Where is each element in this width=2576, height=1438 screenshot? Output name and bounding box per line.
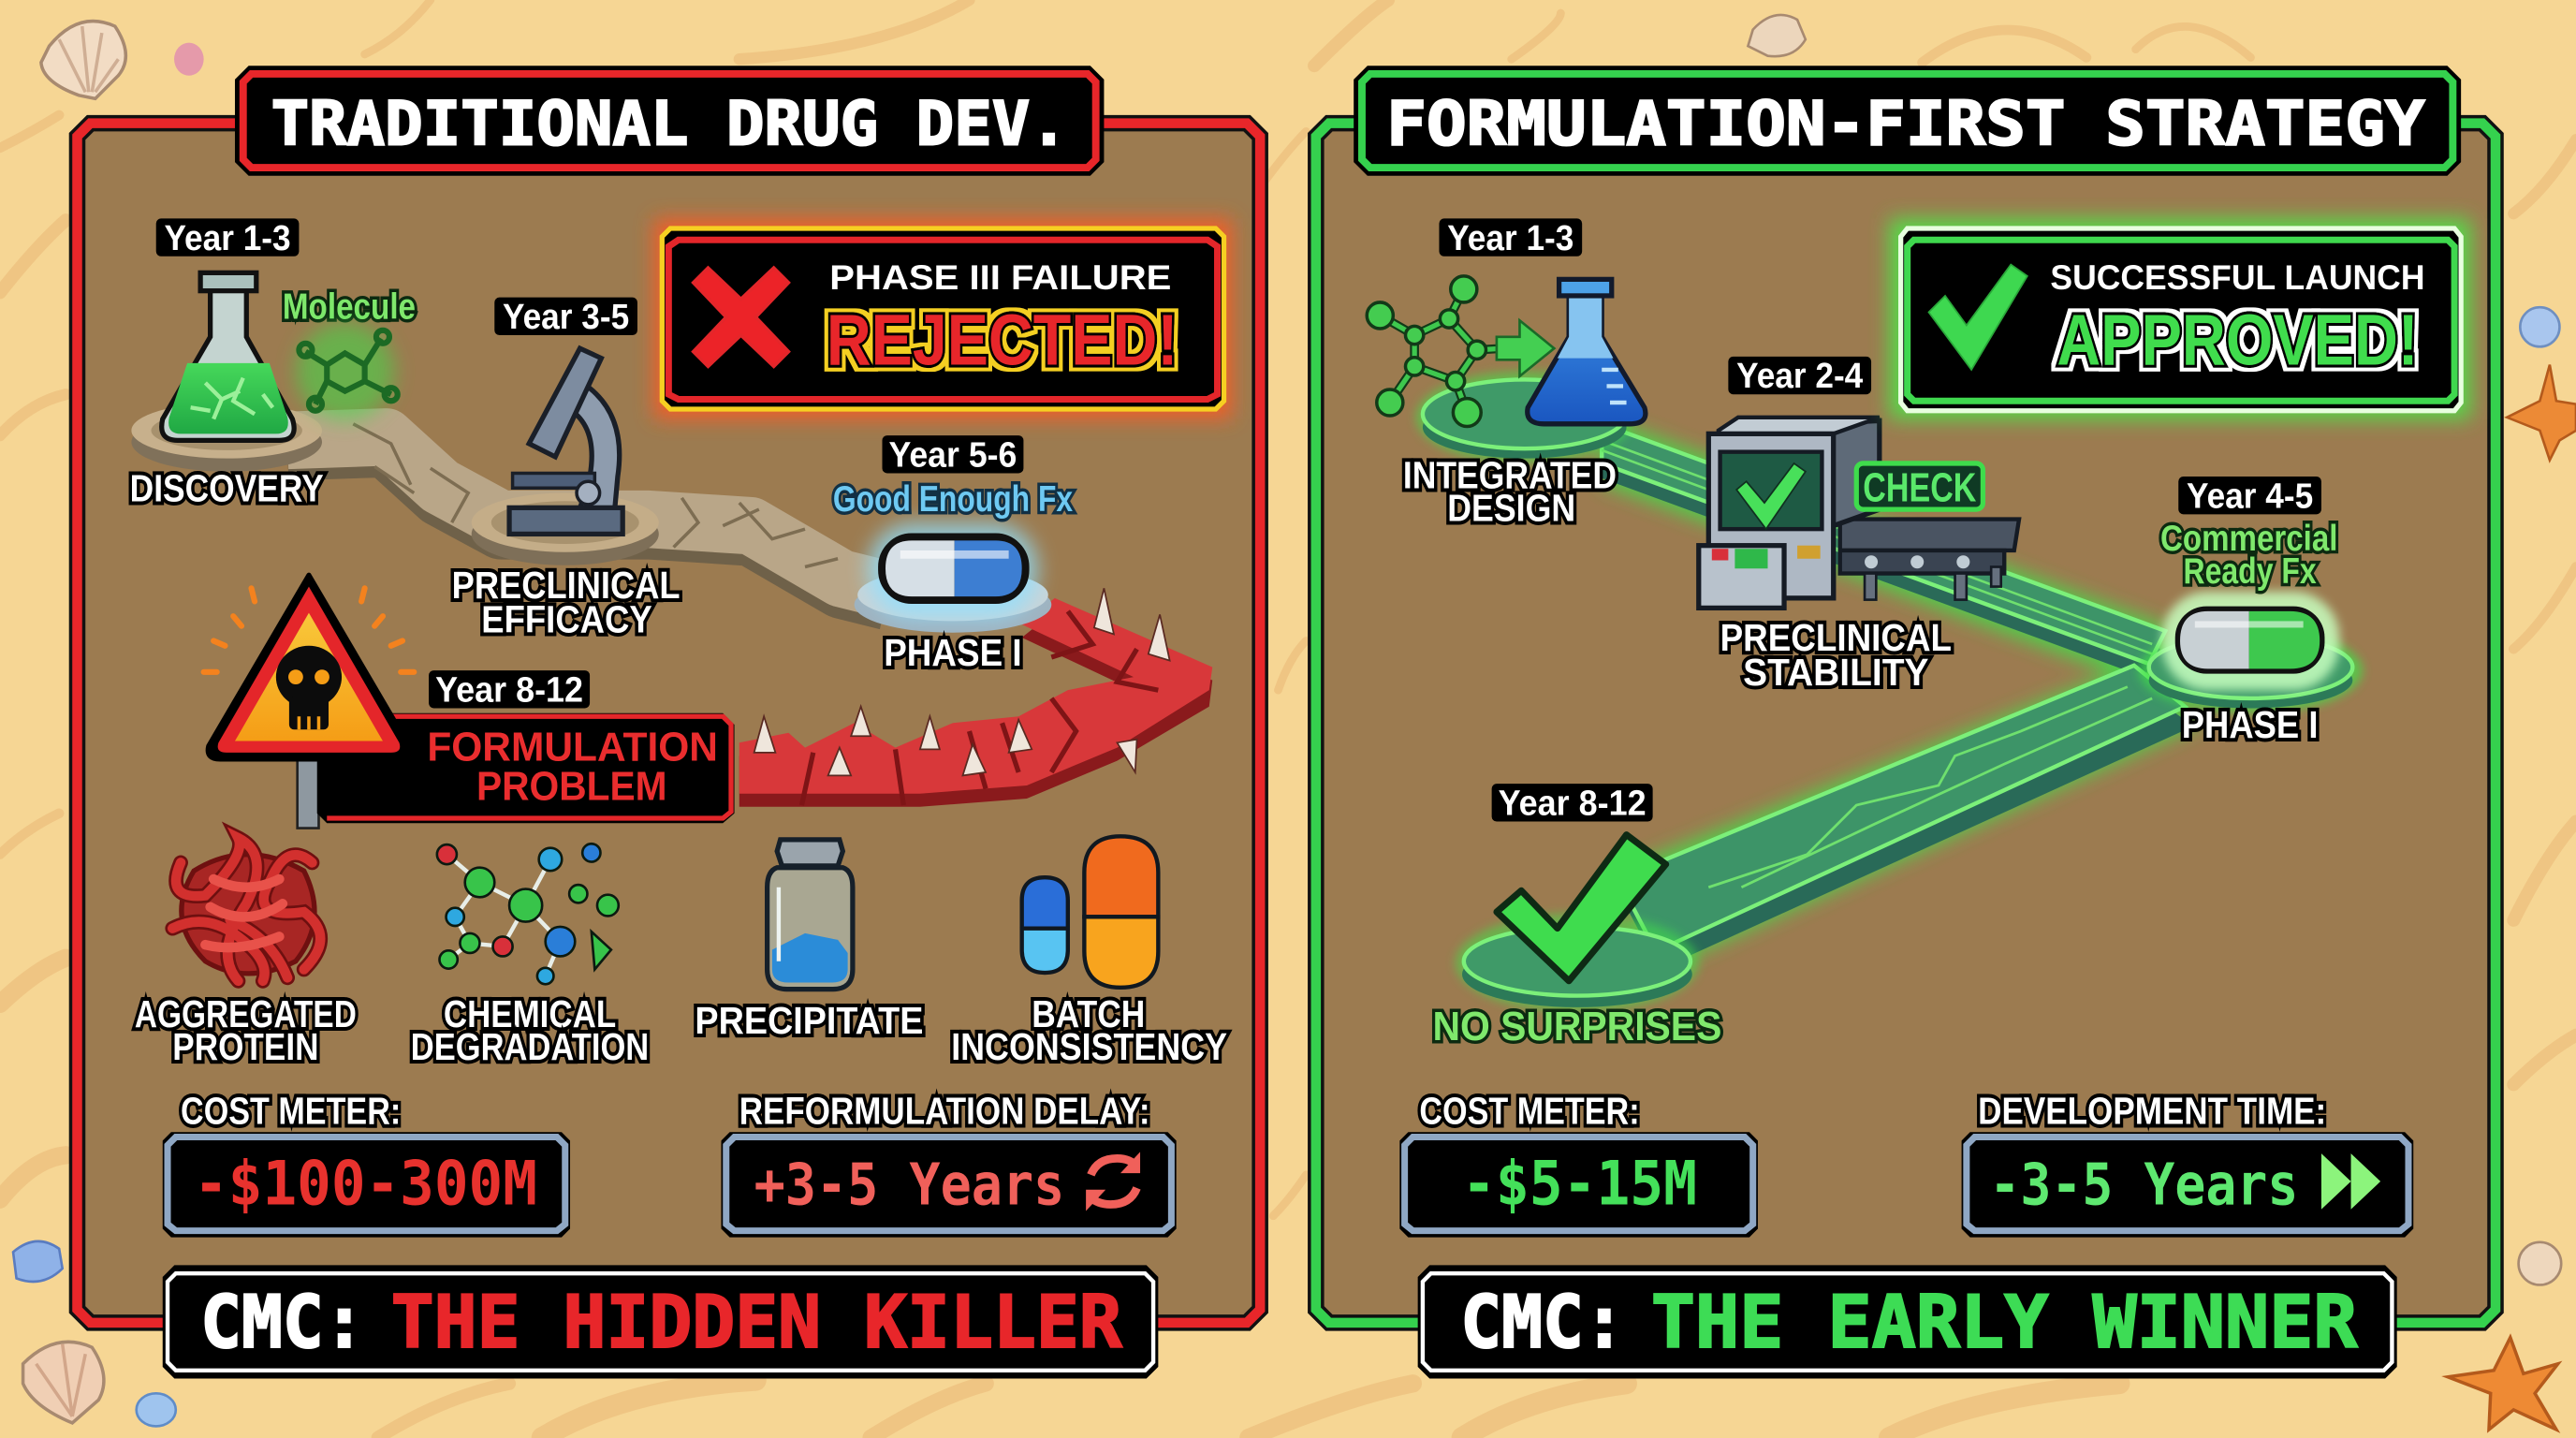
skull [276, 646, 342, 729]
problem: aggregated protein [135, 838, 357, 1068]
footer: early winner: CMC: [1460, 1281, 1625, 1365]
title: formulation-first strategy [1360, 72, 2454, 169]
year tag: Year 5-6 [889, 434, 1017, 474]
label: good enough fx: Good Enough Fx [833, 479, 1074, 520]
label: commercial ready fx: Commercial [2160, 519, 2338, 559]
callout: formulation problem [298, 669, 735, 829]
title: traditional drug dev: TRADITIONAL DRUG DEV. [271, 89, 1068, 159]
icon: conveyor [1840, 520, 2019, 600]
shell: right lower [2519, 1242, 2561, 1284]
starfish: right [2507, 365, 2576, 460]
label: PRECIPITATE [695, 999, 923, 1042]
glow [1602, 418, 2202, 970]
label: CHEMICAL [444, 992, 616, 1035]
meter: time: -3-5 Years [1989, 1152, 2298, 1218]
label: commercial ready fx [2160, 519, 2338, 592]
icon: capsule blue [868, 522, 1038, 618]
icon: molecule [296, 322, 398, 420]
shell: blue left [13, 1241, 63, 1282]
platform [2139, 627, 2363, 713]
label: AGGREGATED [135, 992, 357, 1035]
label [411, 992, 649, 1068]
glowing circuit paths [1602, 418, 2202, 970]
label: INTEGRATED [1403, 453, 1617, 496]
meter: delay: +3-5 Years [754, 1152, 1064, 1218]
meter: time [1965, 1136, 2410, 1234]
platform [855, 568, 1051, 633]
label: cost meter: COST METER: [1419, 1089, 1640, 1132]
label: INCONSISTENCY [951, 1025, 1227, 1068]
year tag: Year 4-5 [2187, 476, 2313, 515]
node: discovery [130, 218, 416, 509]
icon: inspection machine [1699, 418, 1880, 608]
spikes [754, 588, 1170, 775]
shell: top middle [1748, 15, 1806, 56]
title: traditional drug dev [242, 72, 1097, 169]
year tag: Year 8-12 [1499, 784, 1647, 823]
footer: hidden killer: THE HIDDEN KILLER [391, 1281, 1122, 1365]
panel: traditional drug development [77, 72, 1260, 1375]
icon: refresh [1086, 1152, 1140, 1211]
text: PROBLEM [476, 764, 667, 810]
meter: cost: -$100-300M [194, 1149, 537, 1219]
platform [1416, 372, 1633, 463]
footer: early winner: THE EARLY WINNER [1651, 1281, 2358, 1365]
platform [1456, 914, 1699, 1012]
footer: hidden killer [166, 1269, 1155, 1375]
label: DESIGN [1447, 486, 1575, 529]
icon: fast forward [2321, 1153, 2380, 1210]
label [951, 992, 1227, 1068]
icon: blue flask [1528, 279, 1646, 424]
problem: chemical degradation [411, 844, 649, 1068]
label [135, 992, 357, 1068]
label: preclinical efficacy [452, 564, 681, 641]
label: commercial ready fx: Ready Fx [2184, 551, 2317, 592]
node: integrated design [1367, 218, 1646, 529]
icon: mismatched capsules [1022, 836, 1158, 988]
label: phase I: PHASE I [2182, 703, 2318, 746]
text: successful launch: SUCCESSFUL LAUNCH [2050, 258, 2425, 297]
icon: capsule green [2162, 592, 2339, 690]
icon: microscope [509, 348, 622, 534]
label: preclinical efficacy: PRECLINICAL [452, 564, 681, 607]
year tag: Year 1-3 [165, 218, 291, 257]
label: BATCH [1032, 992, 1145, 1035]
pebble: blue bottom [137, 1393, 176, 1426]
tag: check: CHECK [1863, 464, 1977, 510]
label: NO SURPRISES [1432, 1004, 1721, 1049]
label: cost meter: COST METER: [181, 1089, 401, 1132]
node: phase I [833, 434, 1074, 674]
text: FORMULATION [427, 725, 718, 770]
year tag: Year 1-3 [1447, 218, 1573, 257]
icon: vial [768, 840, 853, 990]
pebble: blue right [2520, 307, 2559, 346]
problem: batch inconsistency [951, 836, 1227, 1068]
red spiked path [739, 588, 1212, 807]
title: formulation-first strategy: FORMULATION-FIRST STRATEGY [1386, 89, 2425, 159]
path: lower band [1618, 666, 2193, 970]
node: preclinical stability [1699, 356, 2019, 694]
text: approved: APPROVED! [2056, 301, 2419, 381]
label: STABILITY [1743, 651, 1929, 694]
meter: cost [166, 1136, 567, 1234]
label [1403, 453, 1617, 529]
shell: top left [41, 22, 125, 98]
label: reformulation delay: REFORMULATION DELAY: [739, 1089, 1150, 1132]
meter: cost [1403, 1136, 1754, 1234]
node: no surprises [1432, 784, 1721, 1049]
icon: red X [694, 268, 788, 366]
label: PRECLINICAL [1720, 616, 1952, 659]
callout: successful launch approved [1889, 218, 2471, 419]
year tag: Year 2-4 [1736, 356, 1863, 395]
pebble: pink [174, 43, 204, 76]
node: phase I commercial ready [2139, 476, 2363, 746]
text: phase III failure: PHASE III FAILURE [829, 258, 1171, 297]
icon: check [1928, 265, 2027, 370]
label: discovery: DISCOVERY [130, 466, 324, 509]
panel: formulation-first strategy [1316, 72, 2496, 1375]
callout: phase III rejected [654, 218, 1232, 419]
label: development time: DEVELOPMENT TIME: [1978, 1089, 2326, 1132]
check on screen [1736, 463, 1806, 529]
meter: delay [724, 1136, 1173, 1234]
platform [131, 403, 322, 472]
label: DEGRADATION [411, 1025, 649, 1068]
icon: arrow [1497, 320, 1554, 376]
footer: early winner [1421, 1269, 2393, 1375]
label: phase I: PHASE I [884, 631, 1022, 674]
icon: green molecule [1367, 276, 1503, 426]
icon: green flask [162, 272, 294, 440]
icon: warning sign [204, 575, 414, 759]
label: molecule: Molecule [283, 286, 416, 327]
icon: tangled protein [172, 838, 320, 981]
year tag: Year 8-12 [435, 669, 583, 709]
text [427, 725, 718, 810]
path: upper band [1602, 424, 2165, 677]
text: rejected: REJECTED! [827, 301, 1178, 381]
label [1720, 616, 1952, 694]
label: PROTEIN [172, 1025, 318, 1068]
icon: big check [1497, 835, 1666, 981]
problem: precipitate [695, 840, 923, 1042]
label: preclinical efficacy: EFFICACY [481, 598, 652, 641]
meter: cost: -$5-15M [1462, 1149, 1697, 1219]
node: preclinical efficacy [452, 297, 681, 641]
shell: bottom left [23, 1342, 104, 1423]
year tag: Year 3-5 [503, 297, 629, 336]
footer: hidden killer: CMC: [200, 1281, 365, 1365]
stone path [287, 424, 887, 600]
icon: broken molecule [437, 844, 619, 984]
alarm rays [204, 588, 414, 672]
starfish: bottom right [2448, 1338, 2558, 1430]
platform [472, 493, 659, 565]
